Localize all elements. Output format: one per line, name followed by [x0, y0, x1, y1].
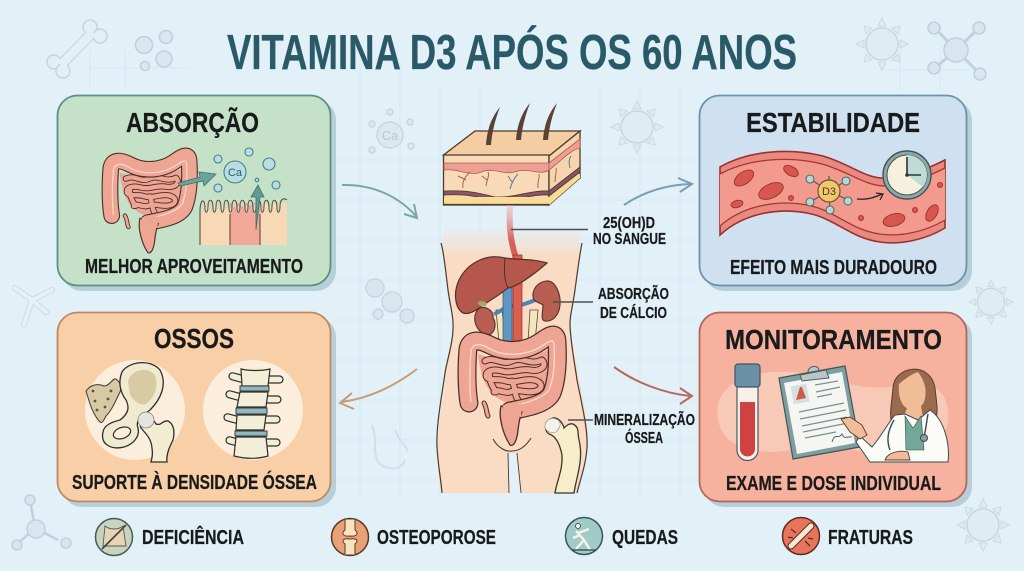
panel: ossos: [58, 312, 336, 507]
illustration: torso: [437, 225, 588, 493]
icon: blood vessel: [720, 151, 945, 243]
icon: decorative molecule left bottom: [12, 495, 71, 550]
caption: absorção: MELHOR APROVEITAMENTO: [85, 256, 303, 278]
heading: absorção: ABSORÇÃO: [126, 107, 259, 138]
legend: quedas: [566, 518, 678, 554]
illustration: blood vessel to liver: [510, 205, 516, 258]
panel: absorção: [58, 96, 336, 291]
icon: clock: [883, 151, 931, 199]
label: mineralização óssea: [594, 409, 695, 447]
icon: decorative sun right: [969, 280, 1013, 324]
caption: monitoramento: EXAME E DOSE INDIVIDUAL: [726, 473, 941, 495]
icon: intestine: [110, 156, 189, 253]
arrow: centre to estabilidade: [624, 178, 692, 205]
legend: fraturas: [782, 518, 913, 554]
label: 25(OH)D no sangue: [593, 215, 666, 248]
icon: doctor: [841, 369, 948, 462]
legend: osteoporose: OSTEOPOROSE: [377, 526, 496, 549]
icon: calcium bubbles: [214, 148, 280, 192]
icon: villi: [200, 199, 287, 245]
icon: decorative calcium cell: Ca: [382, 128, 399, 143]
leader: 25(OH)D: [511, 228, 588, 230]
caption: estabilidade: EFEITO MAIS DURADOURO: [730, 257, 937, 279]
arrow: centre to monitoramento: [614, 367, 692, 404]
icon: deficiência: [96, 518, 132, 556]
legend: quedas: QUEDAS: [612, 526, 678, 549]
label: 25(OH)D no sangue: 25(OH)D: [603, 215, 655, 232]
icon: decorative sun centre: [611, 101, 663, 153]
leader: absorção de cálcio: [553, 301, 593, 303]
label: absorção de cálcio: ABSORÇÃO: [598, 283, 669, 303]
icon: d3 molecule: D3: [822, 186, 836, 198]
arrow: villi upward: [251, 185, 264, 230]
legend: fraturas: FRATURAS: [828, 526, 913, 549]
label: absorção de cálcio: DE CÁLCIO: [600, 303, 667, 322]
caption: ossos: SUPORTE À DENSIDADE ÓSSEA: [72, 470, 317, 494]
illustration: femur: [545, 418, 581, 493]
illustration: skin block: [444, 103, 580, 205]
heading: ossos: OSSOS: [154, 323, 234, 354]
icon: clipboard: [779, 366, 860, 459]
icon: decorative bone: [47, 20, 107, 78]
icon: blood test tube: [735, 364, 760, 460]
arrow: centre to ossos: [340, 369, 417, 409]
icon: calcium bubbles: Ca: [228, 167, 243, 179]
icon: decorative molecule top right: [928, 22, 986, 80]
icon: decorative calcium cell: [369, 109, 414, 153]
label: mineralização óssea: MINERALIZAÇÃO: [594, 409, 695, 429]
legend: osteoporose: [332, 518, 496, 556]
label: mineralização óssea: ÓSSEA: [625, 428, 663, 447]
icon: decorative molecule centre: [366, 279, 414, 323]
icon: hip bone: [85, 360, 185, 462]
legend: deficiência: DEFICIÊNCIA: [142, 525, 244, 549]
icon: knee joint: [332, 518, 368, 556]
icon: d3 molecule: [806, 175, 852, 214]
icon: falling person: [566, 518, 602, 554]
arrow: absorção to centre: [342, 185, 417, 218]
label: 25(OH)D no sangue: NO SANGUE: [593, 231, 666, 248]
icon: decorative cells: [136, 30, 172, 70]
icon: spine: [203, 360, 303, 460]
icon: decorative branch left: [15, 288, 52, 324]
title: VITAMINA D3 APÓS OS 60 ANOS: [227, 25, 797, 80]
arrow: intestine to calcium: [178, 172, 216, 186]
panel: monitoramento: [700, 312, 972, 507]
icon: decorative sun bottom right: [957, 499, 1009, 551]
leader: mineralização óssea: [568, 419, 593, 421]
icon: decorative knee: [372, 425, 408, 468]
illustration: kidneys: [475, 281, 560, 335]
heading: estabilidade: ESTABILIDADE: [746, 107, 920, 138]
panel: estabilidade: [700, 96, 972, 291]
icon: decorative sun top right: [856, 18, 908, 70]
legend: deficiência: [96, 518, 244, 556]
arrow: d3 to clock: [857, 193, 883, 200]
illustration: intestines: [467, 335, 557, 445]
illustration: liver: [456, 257, 547, 314]
icon: fractured bone: [782, 518, 820, 554]
label: absorção de cálcio: [598, 283, 669, 322]
illustration: vessels and ureters: [494, 255, 540, 342]
heading: monitoramento: MONITORAMENTO: [725, 324, 942, 355]
